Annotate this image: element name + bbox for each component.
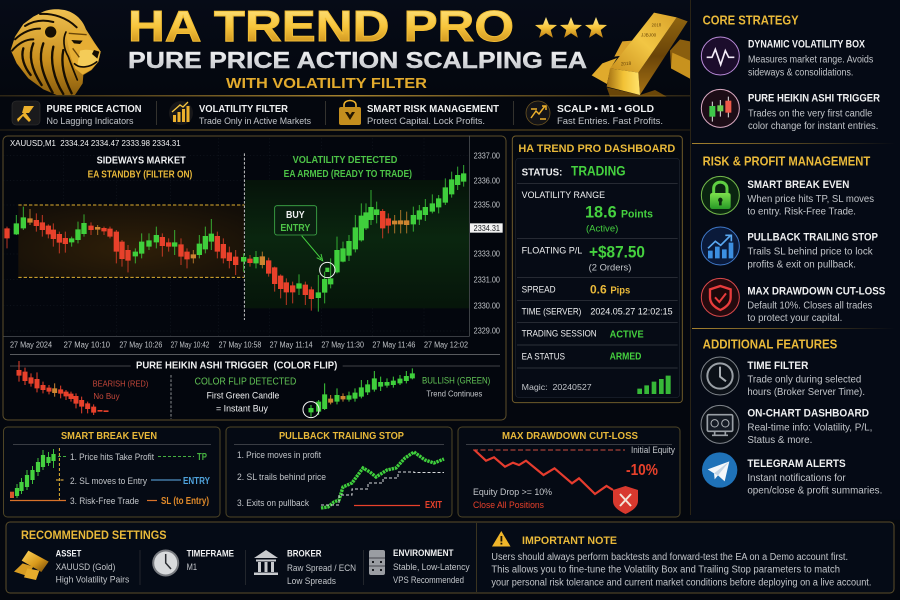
item: pure heikin ashi trigger: PURE HEIKIN ASHI TRIGGER xyxy=(748,92,880,104)
callout: buy entry: ENTRY xyxy=(280,223,311,234)
setting: timeframe: TIMEFRAME xyxy=(187,549,234,560)
icon: gold bars: 2018 xyxy=(652,22,662,28)
magic number: Magic: 20240527 xyxy=(522,382,592,392)
price axis labels: 2333.00 xyxy=(474,250,500,259)
price axis labels: 2331.00 xyxy=(474,275,500,284)
price axis labels: 2330.00 xyxy=(474,301,500,310)
item: telegram alerts xyxy=(702,452,882,497)
status row xyxy=(522,164,626,179)
mini candles xyxy=(10,448,194,500)
ea status: ARMED xyxy=(610,352,641,363)
panel: pullback trailing stop: 3. Exits on pullback xyxy=(237,498,309,509)
feature: volatility filter: VOLATILITY FILTER xyxy=(199,103,288,115)
floating pl: (2 Orders) xyxy=(589,262,631,272)
item: time filter xyxy=(701,357,865,398)
time axis labels: 27 May 12:02 xyxy=(424,340,468,349)
item: smart break even: SMART BREAK EVEN xyxy=(747,179,849,191)
panel: recommended settings and note xyxy=(6,522,894,593)
feature: scalp m1 gold: Fast Entries. Fast Profits. xyxy=(557,116,663,127)
panel: smart break even: ENTRY xyxy=(183,476,210,487)
time axis labels: 27 May 10:42 xyxy=(171,340,210,349)
note text: This allows you to fine-tune the Volatility Box and Trailing Stop parameters to match xyxy=(491,565,840,576)
ea status: EA STATUS xyxy=(522,351,565,361)
server time: TIME (SERVER) xyxy=(522,306,581,316)
item: time filter: hours (Broker Server Time). xyxy=(747,387,865,398)
time axis labels: 27 May 11:46 xyxy=(372,340,416,349)
dashboard heading: HA TREND PRO DASHBOARD xyxy=(518,143,675,155)
volatility range: 18.6 xyxy=(585,203,617,222)
setting: environment xyxy=(369,548,470,586)
setting: asset: XAUUSD (Gold) xyxy=(56,562,115,573)
item: max drawdown cut-loss xyxy=(701,278,885,324)
volatility label: VOLATILITY DETECTED xyxy=(293,155,397,166)
price axis labels xyxy=(474,151,500,335)
item: on-chart dashboard: ON-CHART DASHBOARD xyxy=(747,408,869,420)
panel: pullback trailing stop: 2. SL trails behind price xyxy=(237,472,326,483)
panel: max drawdown cut-loss xyxy=(458,427,680,517)
status row: STATUS: xyxy=(522,167,562,178)
trail chart xyxy=(321,452,444,508)
equity curve xyxy=(474,450,613,494)
feature: smart risk management: SMART RISK MANAGEMENT xyxy=(367,103,500,115)
candlesticks: green xyxy=(16,165,464,312)
item: smart break even xyxy=(701,176,874,218)
bearish label xyxy=(93,378,148,401)
sideways label: EA STANDBY (FILTER ON) xyxy=(88,170,192,181)
setting: environment: ENVIRONMENT xyxy=(393,548,454,559)
sideways label xyxy=(88,156,192,181)
subtitle: PURE PRICE ACTION SCALPING EA xyxy=(128,47,587,73)
setting: asset xyxy=(14,549,130,586)
panel: smart break even: SL (to Entry) xyxy=(161,496,209,507)
heading: core strategy: CORE STRATEGY xyxy=(703,13,799,28)
panel: pullback trailing stop: PULLBACK TRAILING STOP xyxy=(279,430,404,442)
feature: pure price action xyxy=(12,101,142,127)
setting: asset: High Volatility Pairs xyxy=(56,575,130,586)
ea status xyxy=(522,351,641,363)
item: smart break even: to entry. Risk-Free Trade. xyxy=(747,207,856,218)
panel: max drawdown cut-loss: Equity Drop >= 10% xyxy=(473,487,553,498)
current price tag: 2334.31 xyxy=(474,224,500,233)
bullish label: Trend Continues xyxy=(426,390,482,399)
icon: gold bars: 2018 xyxy=(621,61,632,67)
feature: volatility filter: Trade Only in Active Markets xyxy=(199,116,311,127)
item: pure heikin ashi trigger xyxy=(701,89,880,132)
amber sideways box xyxy=(18,205,244,277)
setting: broker: Raw Spread / ECN xyxy=(287,563,356,574)
feature: scalp m1 gold: SCALP • M1 • GOLD xyxy=(557,103,654,115)
green volatility zone xyxy=(245,180,469,308)
panel: pullback trailing stop xyxy=(226,427,452,517)
heading: risk and profit: RISK & PROFIT MANAGEMENT xyxy=(703,154,870,169)
icon: shield x xyxy=(613,486,638,514)
panel: max drawdown cut-loss: Close All Positions xyxy=(473,500,544,511)
floating pl: +$87.50 xyxy=(589,242,645,261)
setting: timeframe xyxy=(153,549,234,576)
volatility range: Points xyxy=(621,208,653,220)
feature: smart risk management: Protect Capital. Lock Profits. xyxy=(367,116,485,127)
volatility label: EA ARMED (READY TO TRADE) xyxy=(284,169,412,180)
setting: asset: ASSET xyxy=(56,549,81,560)
signal bars xyxy=(637,376,671,394)
callout: buy entry: BUY xyxy=(286,210,305,221)
item: dynamic volatility box: sideways & consolidations. xyxy=(748,68,853,79)
spread: 0.6 xyxy=(590,282,607,296)
item: max drawdown cut-loss: to protect your capital. xyxy=(747,313,842,324)
item: dynamic volatility box: Measures market range. Avoids xyxy=(748,55,873,66)
item: dynamic volatility box xyxy=(701,37,873,79)
price axis labels: 2329.00 xyxy=(474,326,500,335)
panel: dashboard xyxy=(512,136,682,403)
setting: broker: BROKER xyxy=(287,549,322,560)
volatility range: VOLATILITY RANGE xyxy=(522,190,605,200)
floating pl xyxy=(522,242,645,272)
note text: Users should always perform backtests and forward-test the EA on a Demo account first. xyxy=(491,552,848,563)
panel: pullback trailing stop: 1. Price moves in profit xyxy=(237,450,321,461)
item: pullback trailing stop xyxy=(701,227,878,270)
price axis labels: 2337.00 xyxy=(474,151,500,160)
trading session: TRADING SESSION xyxy=(522,329,597,339)
feature strip xyxy=(0,95,690,130)
candlesticks: red xyxy=(7,209,388,311)
bullish label: BULLISH (GREEN) xyxy=(422,376,490,386)
feature: scalp m1 gold xyxy=(526,101,663,127)
server time: 2024.05.27 12:02:15 xyxy=(590,306,673,316)
icon: gold bars: JJBJ00 xyxy=(641,33,657,38)
arrow: to entry candle xyxy=(302,236,323,261)
feature: pure price action: No Lagging Indicators xyxy=(46,116,134,127)
panel: smart break even xyxy=(4,427,220,517)
bullish label xyxy=(422,376,490,399)
setting: environment: Stable, Low-Latency xyxy=(393,562,470,573)
spread: SPREAD xyxy=(522,284,556,294)
header background xyxy=(0,0,690,96)
item: smart break even: When price hits TP, SL moves xyxy=(747,194,874,205)
setting: timeframe: M1 xyxy=(187,562,197,573)
icon: warning triangle xyxy=(492,531,510,546)
sideways label: SIDEWAYS MARKET xyxy=(97,156,186,167)
floating pl: FLOATING P/L xyxy=(522,245,582,255)
panel: smart break even: 3. Risk-Free Trade xyxy=(70,496,139,507)
item: time filter: Trade only during selected xyxy=(747,375,861,386)
item: telegram alerts: TELEGRAM ALERTS xyxy=(747,458,846,470)
color flip label: First Green Candle xyxy=(207,391,279,401)
trigger section heading: PURE HEIKIN ASHI TRIGGER (COLOR FLIP) xyxy=(136,360,337,371)
icon: three stars xyxy=(535,17,607,38)
item: pure heikin ashi trigger: color change for instant entries. xyxy=(748,121,878,132)
time axis labels: 27 May 11:14 xyxy=(270,340,313,349)
panel: main price chart xyxy=(3,136,506,420)
item: dynamic volatility box: DYNAMIC VOLATILITY BOX xyxy=(748,38,866,50)
setting: broker: Low Spreads xyxy=(287,576,336,587)
spread: Pips xyxy=(610,285,631,296)
icon: golden lion head xyxy=(11,9,101,95)
panel: pullback trailing stop: EXIT xyxy=(425,500,442,511)
price axis labels: 2335.00 xyxy=(474,201,500,210)
item: on-chart dashboard: Real-time info: Volatility, P/L, xyxy=(747,422,872,433)
settings heading: RECOMMENDED SETTINGS xyxy=(21,530,167,542)
feature: pure price action: PURE PRICE ACTION xyxy=(46,103,142,115)
panel: max drawdown cut-loss: -10% xyxy=(626,462,658,479)
color flip label: COLOR FLIP DETECTED xyxy=(195,376,296,387)
time axis labels: 27 May 2024 xyxy=(10,340,53,349)
price axis labels: 2336.00 xyxy=(474,176,500,185)
candlesticks: orange xyxy=(30,209,407,268)
tagline: WITH VOLATILITY FILTER xyxy=(226,75,427,92)
note text: your personal risk tolerance and current market conditions before deploying on a live account. xyxy=(491,578,871,589)
trading session: ACTIVE xyxy=(610,329,644,340)
time axis labels: 27 May 10:58 xyxy=(219,340,262,349)
feature: smart risk management xyxy=(339,100,500,127)
time axis labels xyxy=(10,340,468,349)
item: telegram alerts: Instant notifications for xyxy=(747,473,846,484)
server time xyxy=(522,306,673,316)
setting: broker xyxy=(254,549,356,587)
item: time filter: TIME FILTER xyxy=(747,360,809,372)
time axis labels: 27 May 11:30 xyxy=(321,340,364,349)
panel: smart break even: 2. SL moves to Entry xyxy=(70,476,147,487)
item: max drawdown cut-loss: Default 10%. Closes all trades xyxy=(747,300,872,311)
time axis labels: 27 May 10:10 xyxy=(64,340,111,349)
spread xyxy=(522,282,631,296)
panel: max drawdown cut-loss: MAX DRAWDOWN CUT-LOSS xyxy=(502,430,638,442)
panel: smart break even: SMART BREAK EVEN xyxy=(61,430,157,442)
setting: environment: VPS Recommended xyxy=(393,575,464,586)
panel: smart break even: 1. Price hits Take Profit xyxy=(70,452,154,463)
item: pure heikin ashi trigger: Trades on the very first candle xyxy=(748,108,873,119)
feature: volatility filter xyxy=(169,101,311,127)
item: telegram alerts: open/close & profit summaries. xyxy=(747,486,882,497)
bearish label: No Buy xyxy=(93,391,120,401)
item: pullback trailing stop: profits & exit on pullback. xyxy=(747,259,856,270)
panel: right column features xyxy=(690,0,900,520)
item: max drawdown cut-loss: MAX DRAWDOWN CUT-LOSS xyxy=(747,285,885,297)
color flip label: = Instant Buy xyxy=(216,404,268,414)
chart symbol header: XAUUSD,M1 2334.24 2334.47 2333.98 2334.31 xyxy=(10,138,181,148)
icon: gold bars xyxy=(592,13,690,97)
note heading: IMPORTANT NOTE xyxy=(522,535,617,547)
mini chart: bullish candles xyxy=(303,368,412,418)
note text xyxy=(491,552,871,589)
item: pullback trailing stop: Trails SL behind price to lock xyxy=(747,246,873,257)
panel: smart break even: TP xyxy=(197,452,207,463)
volatility range xyxy=(522,190,653,233)
item: on-chart dashboard: Status & more. xyxy=(747,435,812,446)
time axis labels: 27 May 10:26 xyxy=(119,340,163,349)
trading session xyxy=(522,329,644,340)
heading: additional features: ADDITIONAL FEATURES xyxy=(703,336,838,351)
panel: max drawdown cut-loss: Initial Equity xyxy=(631,445,675,455)
item: pullback trailing stop: PULLBACK TRAILING STOP xyxy=(747,232,878,244)
title: HA TREND PRO xyxy=(128,2,514,51)
volatility range: (Active) xyxy=(586,223,618,233)
status row: TRADING xyxy=(571,164,626,179)
mini chart: bearish candles xyxy=(19,361,106,415)
color flip label xyxy=(195,376,296,414)
volatility label xyxy=(284,155,412,180)
item: on-chart dashboard xyxy=(701,405,872,446)
entry marker circle xyxy=(320,262,335,278)
bearish label: BEARISH (RED) xyxy=(93,378,148,388)
callout: buy entry xyxy=(275,206,317,235)
